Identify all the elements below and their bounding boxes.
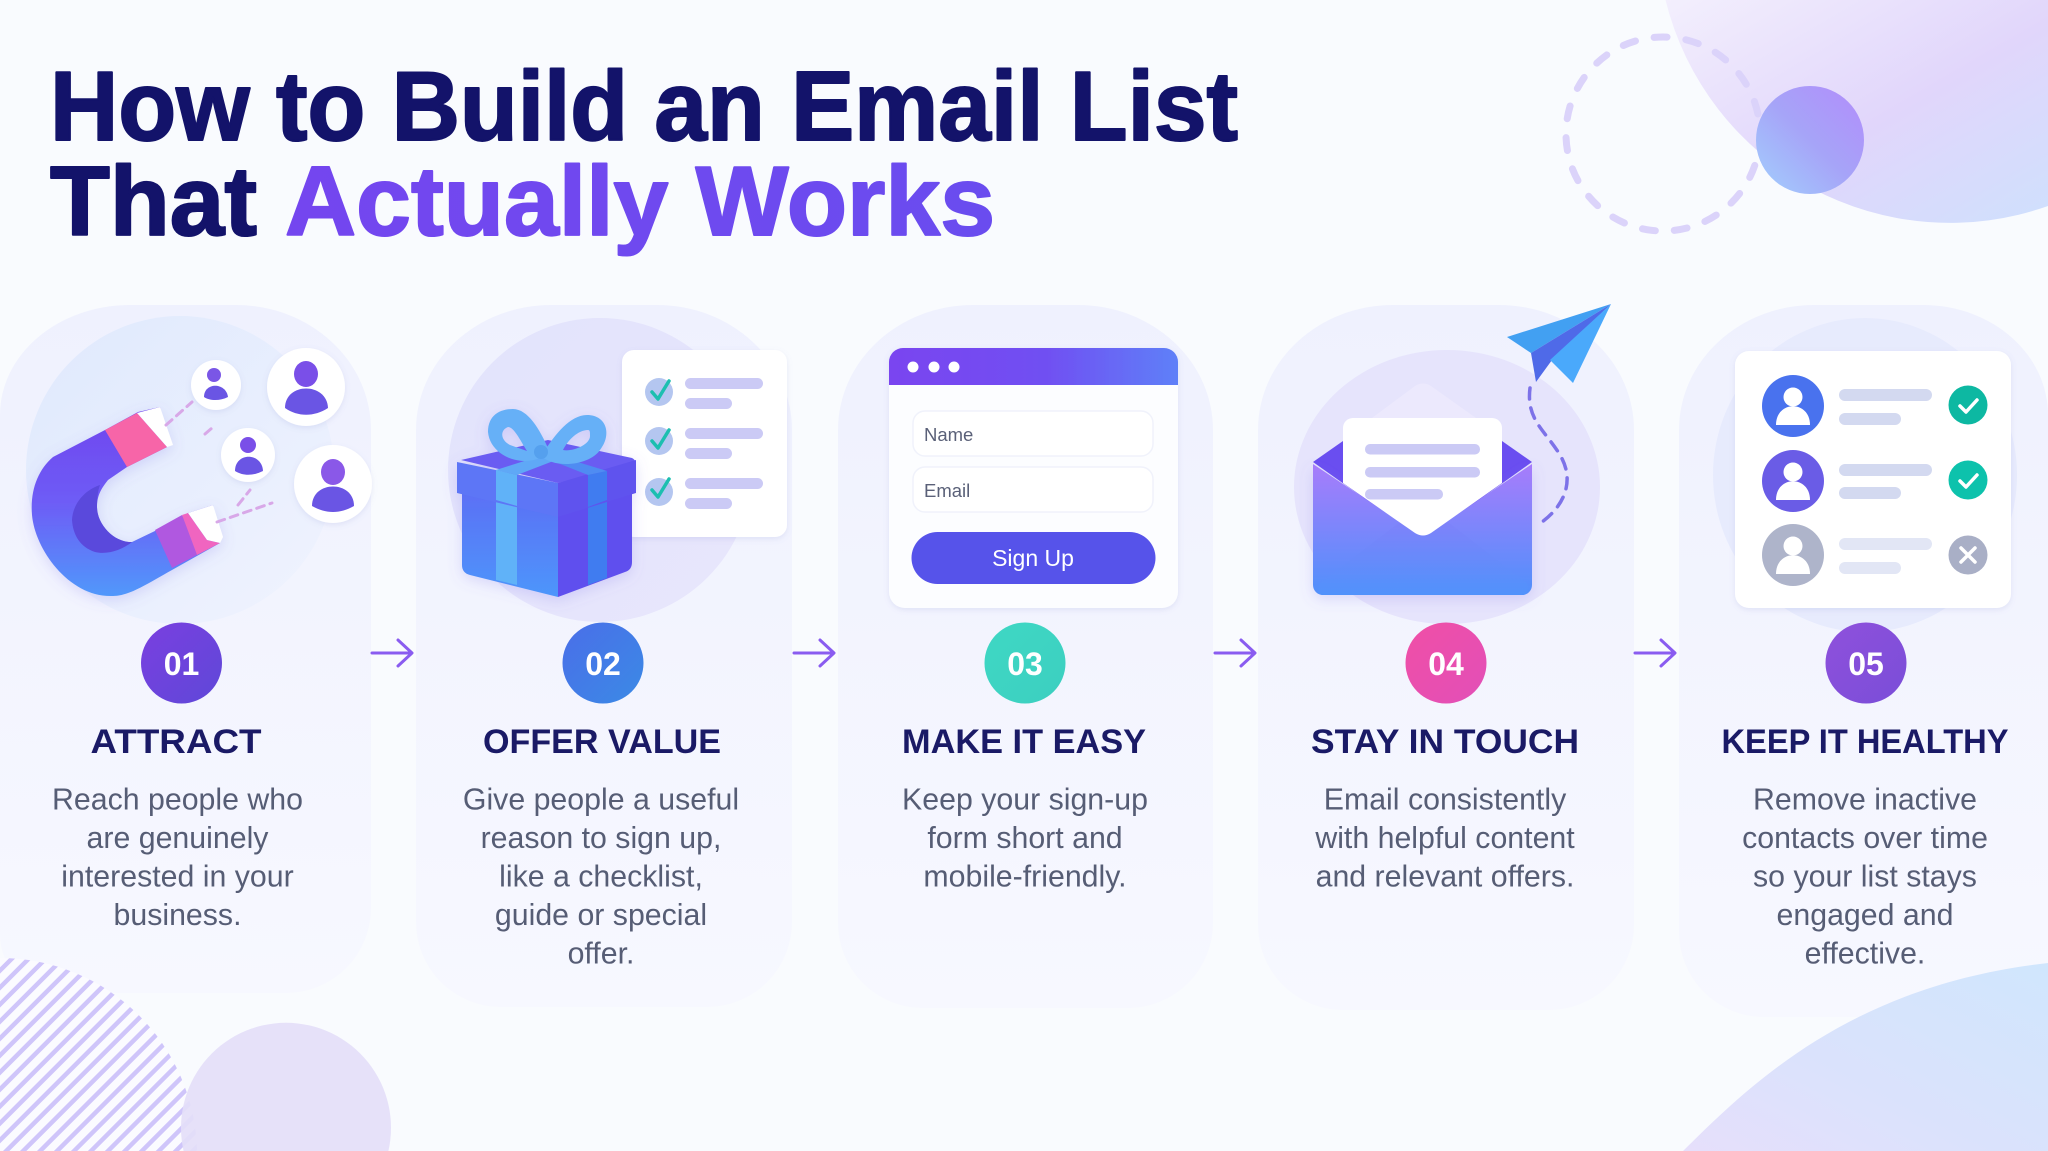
- title: That: [50, 146, 257, 256]
- body text: attract: Reach people who: [52, 784, 303, 816]
- step number 05: 05: [1848, 646, 1884, 682]
- step number 02: 02: [585, 646, 621, 682]
- body text: make it easy: mobile-friendly.: [923, 860, 1127, 894]
- panel: step 4 stay in touch: [1258, 304, 1634, 1010]
- decoration: bottom right blob: [1683, 963, 2048, 1151]
- step number 02: [562, 622, 644, 704]
- arrow 4: [1635, 640, 1675, 666]
- title: How to Build an Email List: [50, 51, 1238, 161]
- heading: stay in touch: STAY IN TOUCH: [1311, 723, 1579, 761]
- window dots: [908, 362, 960, 372]
- body text: stay in touch: Email consistently: [1324, 784, 1567, 816]
- body text: stay in touch: with helpful content: [1314, 822, 1575, 855]
- envelope inside: [1313, 441, 1532, 540]
- illustration: gift and checklist: [448, 318, 787, 622]
- form header bar: [889, 348, 1178, 385]
- name field: Name: [924, 424, 973, 445]
- body text: keep it healthy: effective.: [1805, 938, 1925, 970]
- panel: step 3 make it easy: [838, 305, 1213, 1008]
- decoration: dashed circle: [1566, 37, 1760, 231]
- body text: keep it healthy: so your list stays: [1753, 860, 1977, 894]
- gift bow: [488, 409, 606, 464]
- heading: keep it healthy: KEEP IT HEALTHY: [1722, 723, 2009, 761]
- icon: person large 2: [294, 445, 372, 523]
- step number 03: [984, 622, 1066, 704]
- icon: paper plane: [1507, 304, 1611, 383]
- body text: offer value: offer.: [568, 938, 634, 970]
- body text: keep it healthy: engaged and: [1777, 899, 1953, 932]
- dashed flight path: [1529, 388, 1567, 522]
- step number 04: [1406, 622, 1486, 704]
- body text: offer value: reason to sign up,: [481, 822, 721, 855]
- card: checklist: [622, 350, 787, 537]
- decoration: lilac circle: [181, 1023, 391, 1151]
- contact row 2: [1762, 450, 1988, 512]
- decoration: striped circle: [0, 958, 197, 1151]
- heading: make it easy: MAKE IT EASY: [902, 723, 1146, 761]
- body text: keep it healthy: Remove inactive: [1753, 784, 1977, 816]
- contact row 3: [1762, 524, 1988, 586]
- body text: keep it healthy: contacts over time: [1742, 822, 1988, 855]
- icon: gift box: [457, 409, 636, 597]
- illustration: contact list: [1713, 318, 2017, 632]
- icon: person small 1: [191, 360, 241, 410]
- magnet field dashes: [166, 402, 272, 522]
- letter: [1343, 418, 1502, 536]
- heading: offer value: OFFER VALUE: [483, 723, 721, 761]
- illustration: envelope and paper plane: [1294, 304, 1611, 624]
- icon: magnet: [32, 407, 223, 596]
- envelope front: [1313, 464, 1532, 595]
- body text: offer value: Give people a useful: [463, 784, 739, 816]
- step number 01: [141, 622, 222, 704]
- panel: step 2 offer value: [416, 305, 792, 1007]
- decoration: gradient ball: [1756, 86, 1864, 194]
- contact list card: [1735, 351, 2011, 608]
- illustration: sign-up form: [889, 348, 1178, 608]
- arrow 3: [1215, 640, 1255, 666]
- step number 05: [1826, 622, 1906, 704]
- decoration: top right blob: [1666, 0, 2048, 223]
- panel: step 1 attract: [0, 305, 372, 993]
- body text: stay in touch: and relevant offers.: [1316, 860, 1574, 894]
- arrow 2: [794, 640, 834, 666]
- body text: offer value: like a checklist,: [499, 860, 703, 894]
- body text: make it easy: form short and: [927, 822, 1123, 855]
- email field: Email: [924, 480, 970, 501]
- envelope back flap: [1372, 384, 1476, 418]
- email field: [913, 467, 1153, 512]
- body text: attract: interested in your: [61, 860, 294, 894]
- title: Actually Works: [285, 146, 995, 256]
- icon: person small 2: [221, 428, 275, 482]
- body text: attract: business.: [114, 899, 242, 932]
- panel: step 5 keep it healthy: [1679, 305, 2048, 1017]
- step number 01: 01: [164, 646, 199, 682]
- sign up button: Sign Up: [992, 545, 1074, 571]
- sign up button: [912, 532, 1156, 584]
- arrow 1: [372, 640, 412, 666]
- step number 03: 03: [1007, 646, 1043, 682]
- title: [50, 51, 1238, 256]
- heading: attract: ATTRACT: [90, 723, 262, 761]
- step number 04: 04: [1428, 646, 1464, 682]
- body text: offer value: guide or special: [495, 899, 707, 932]
- contact row 1: [1762, 375, 1988, 437]
- icon: person large 1: [267, 348, 345, 426]
- illustration: magnet attracting people: [26, 316, 372, 624]
- name field: [913, 411, 1153, 456]
- body text: attract: are genuinely: [87, 822, 269, 855]
- body text: make it easy: Keep your sign-up: [902, 784, 1148, 816]
